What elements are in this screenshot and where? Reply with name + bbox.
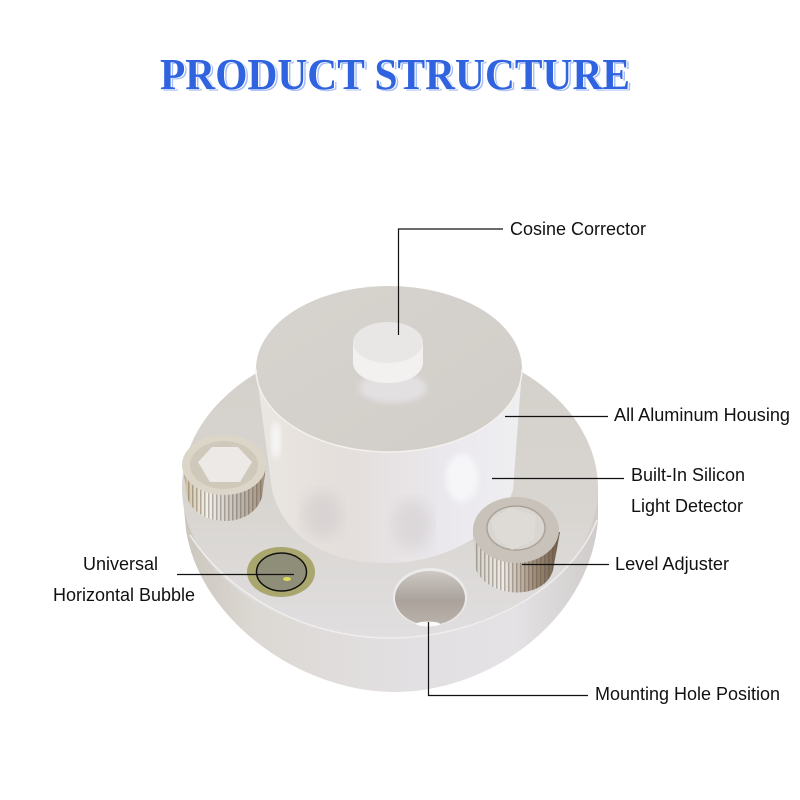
callout: universal horizontal bubble: Universal [83, 554, 158, 574]
right knob [473, 497, 560, 592]
title: PRODUCT STRUCTURE [162, 52, 632, 100]
main housing cylinder [256, 286, 522, 563]
cosine corrector cap [353, 322, 423, 383]
title: PRODUCT STRUCTURE [161, 51, 631, 100]
horizontal bubble level [247, 547, 315, 597]
device illustration [182, 286, 598, 692]
callout: universal horizontal bubble [53, 554, 294, 605]
callout: all aluminum housing: All Aluminum Housing [614, 405, 790, 425]
callout: built-in silicon light detector [492, 465, 745, 516]
callout: universal horizontal bubble: Horizontal Bubble [53, 585, 195, 605]
callout: mounting hole position: Mounting Hole Position [595, 684, 780, 704]
callout: cosine corrector [398, 219, 646, 335]
mounting hole [393, 568, 467, 626]
callout: level adjuster: Level Adjuster [615, 554, 729, 574]
callout: built-in silicon light detector: Light Detector [631, 496, 743, 516]
title: PRODUCT STRUCTURE [160, 50, 630, 99]
callout: built-in silicon light detector: Built-In Silicon [631, 465, 745, 485]
base flange [182, 338, 598, 692]
callout: cosine corrector: Cosine Corrector [510, 219, 646, 239]
callout: mounting hole position [428, 622, 780, 704]
left knob [182, 435, 266, 521]
